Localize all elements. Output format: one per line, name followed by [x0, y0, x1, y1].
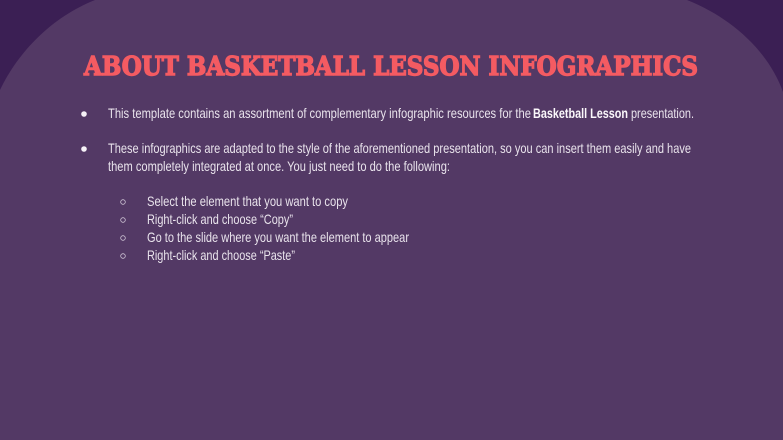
step 1: Select the element that you want to copy [147, 193, 348, 209]
title: ABOUT BASKETBALL LESSON INFOGRAPHICS [83, 51, 698, 82]
bullet item: template description [81, 105, 694, 121]
step 2: Right-click and choose “Copy” [147, 211, 293, 227]
sub-list: steps [121, 193, 409, 263]
text: template contents: Basketball Lesson [533, 105, 628, 121]
text: adaptation details [108, 140, 691, 174]
text: adaptation details: them completely integrated at once. You just need to do the following: [108, 158, 450, 174]
step 4 [121, 247, 295, 263]
bullet marker [81, 111, 87, 117]
bullet marker [81, 146, 87, 152]
step 2 [121, 211, 293, 227]
step 4: Right-click and choose “Paste” [147, 247, 295, 263]
bullet item: adaptation description [81, 140, 691, 174]
text: template contents: This template contains an assortment of complementary infographic resources for the [108, 105, 531, 121]
step 3: Go to the slide where you want the element to appear [147, 229, 409, 245]
text: template contents: presentation. [631, 105, 694, 121]
